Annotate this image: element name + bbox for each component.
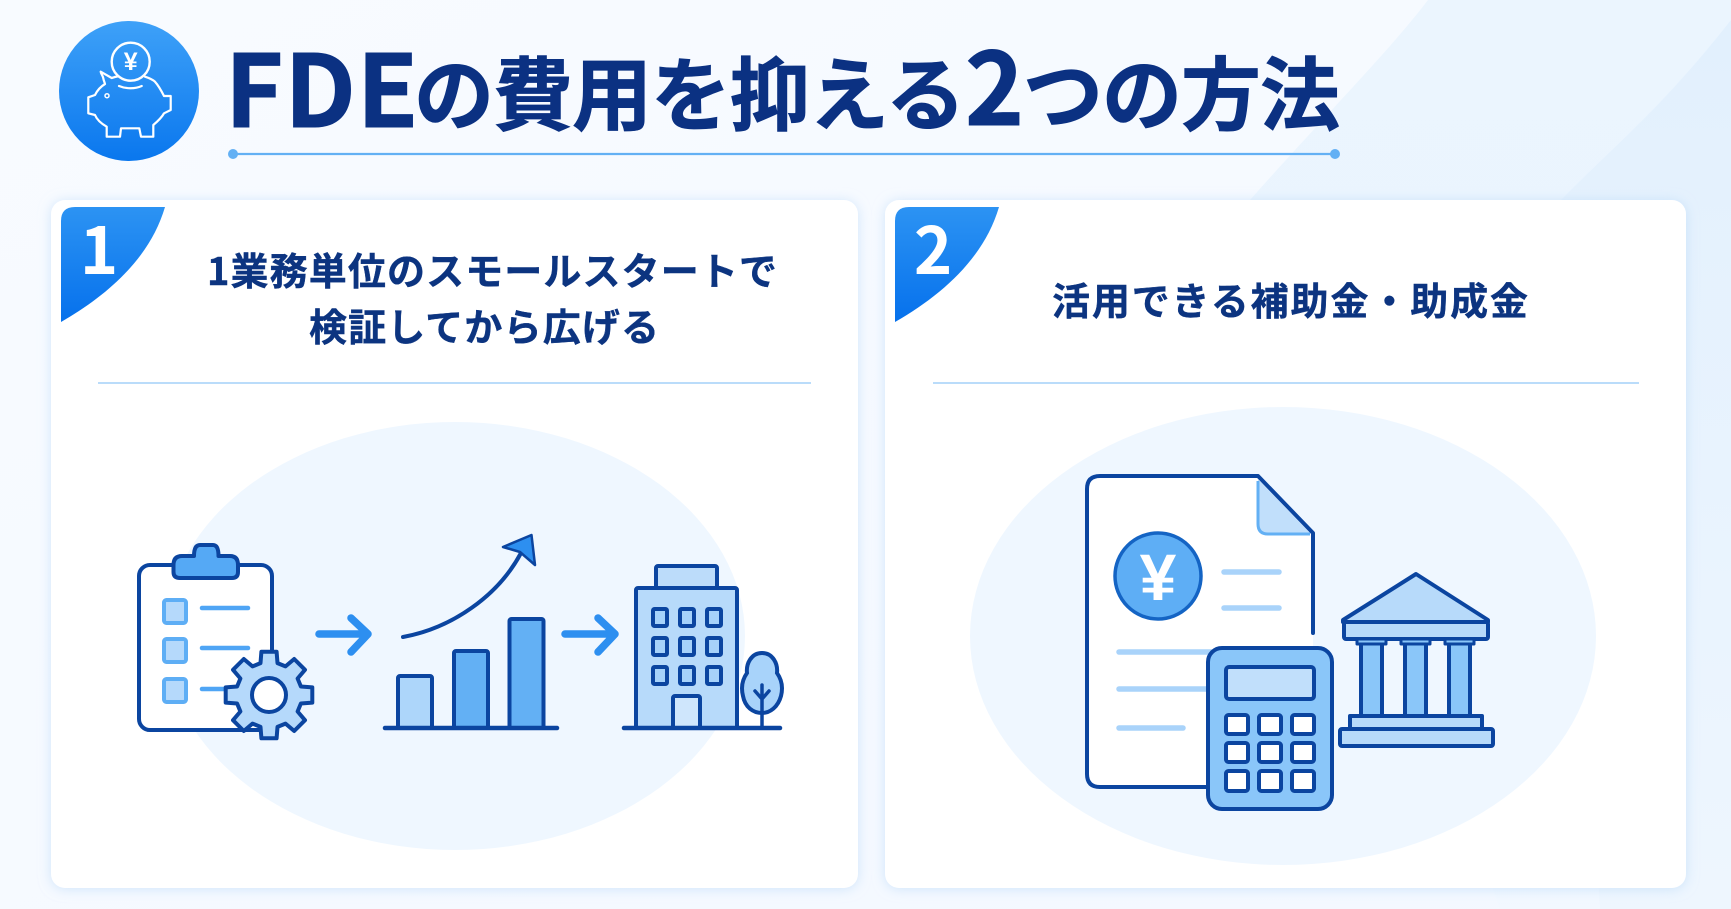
title xyxy=(225,9,1339,156)
icon: gear xyxy=(226,652,312,738)
heading 2: 活用できる補助金・助成金 xyxy=(1052,271,1528,326)
panel: small start xyxy=(51,199,858,888)
title underline xyxy=(228,149,1340,159)
icon: bank xyxy=(1340,574,1493,746)
icon: office building with tree xyxy=(624,566,782,728)
icon: document with yen: ¥ xyxy=(1140,540,1177,614)
number badge 2: 2 xyxy=(914,199,952,293)
icon: clipboard with gear xyxy=(139,545,312,738)
icon: growth bar chart xyxy=(385,535,557,728)
icon: document with yen xyxy=(1087,476,1313,787)
number badge 1 xyxy=(61,199,165,322)
background ellipse xyxy=(165,422,745,850)
icon: piggy bank badge xyxy=(59,21,199,161)
title: 2 xyxy=(965,9,1024,154)
heading 1: 検証してから広げる xyxy=(309,297,659,352)
icon: piggy bank badge: ¥ xyxy=(124,48,138,76)
title: FDE xyxy=(225,11,419,156)
arrow 2 xyxy=(565,618,615,652)
panel: subsidies xyxy=(885,199,1686,888)
number badge 2 xyxy=(895,199,999,322)
title: つの方法 xyxy=(1023,32,1339,148)
icon: calculator xyxy=(1208,648,1332,809)
card background xyxy=(51,200,858,888)
background ellipse xyxy=(970,407,1596,865)
arrow 1 xyxy=(319,618,368,652)
number badge 1: 1 xyxy=(80,199,118,293)
heading 1: 1業務単位のスモールスタートで xyxy=(207,241,777,296)
title: の費用を抑える xyxy=(414,32,965,148)
heading 1 xyxy=(207,241,777,352)
card background xyxy=(885,200,1686,888)
